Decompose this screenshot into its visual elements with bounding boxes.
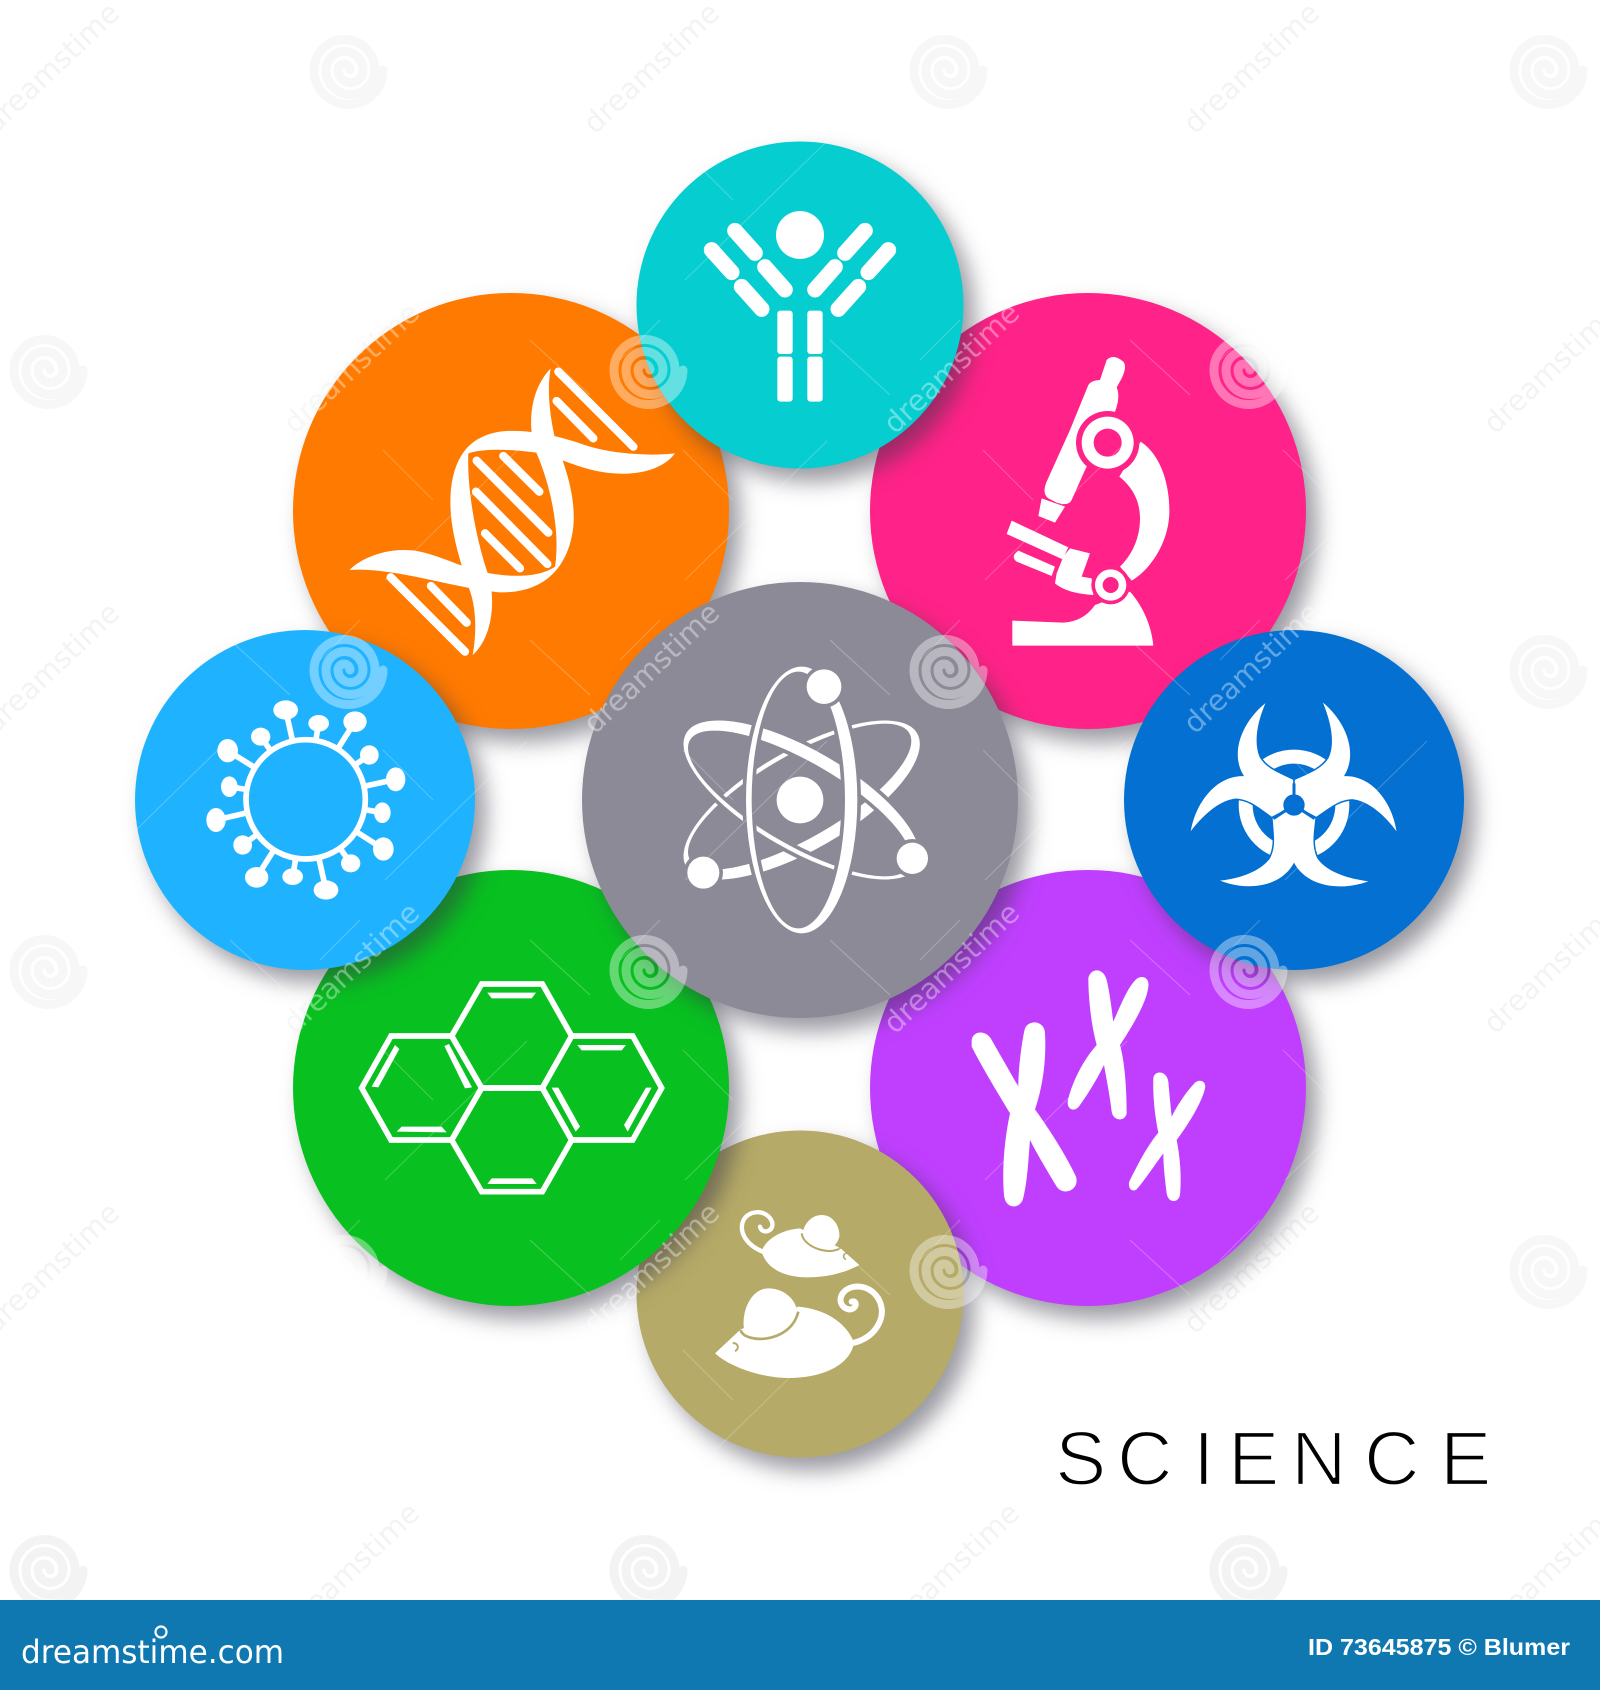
panel: pink circle with microscope (870, 293, 1306, 729)
watermark overlay: dreamstime (876, 296, 1026, 440)
panel: green circle with honeycomb molecule (293, 870, 729, 1306)
watermark overlay: dreamstime (276, 896, 426, 1040)
watermark on white background: dreamstime (276, 1496, 426, 1640)
watermark overlay: dreamstime (576, 1196, 726, 1340)
icon: biohazard (1186, 700, 1402, 886)
watermark on white background: dreamstime (276, 896, 426, 1040)
watermark overlay: dreamstime (876, 896, 1026, 1040)
watermark overlay: dreamstime (276, 296, 426, 440)
watermark on white background: dreamstime (276, 296, 426, 440)
icon: mice (715, 1212, 882, 1378)
watermark on white background: dreamstime (876, 1496, 1026, 1640)
panel: light blue circle with virus (135, 630, 475, 970)
icon: microscope (1007, 357, 1169, 646)
icon: antibody (712, 211, 888, 402)
icon: DNA helix (349, 368, 675, 655)
panel: olive circle with mice (636, 1130, 964, 1458)
panel: dark blue circle with biohazard (1124, 630, 1464, 970)
watermark overlay: dreamstime (576, 596, 726, 740)
watermark on white background: dreamstime (1176, 1196, 1326, 1340)
watermark overlay: dreamstime (1176, 596, 1326, 740)
footer band (0, 1600, 1600, 1690)
panel: teal circle with antibody (636, 142, 964, 468)
panel: grey circle with atom (582, 582, 1018, 1018)
footer logo: dreamstime.com: dreamstime.com (21, 1633, 284, 1671)
icon: atom (661, 667, 942, 933)
icon: molecule (362, 984, 662, 1192)
footer credit: image id: ID 73645875 © Blumer (1308, 1634, 1570, 1660)
icon: virus (206, 700, 405, 900)
title: SCIENCE: SCIENCE (1055, 1416, 1491, 1502)
icon: chromosomes (972, 970, 1205, 1206)
panel: purple circle with chromosomes (870, 870, 1306, 1306)
panel: orange circle with DNA (293, 293, 729, 729)
